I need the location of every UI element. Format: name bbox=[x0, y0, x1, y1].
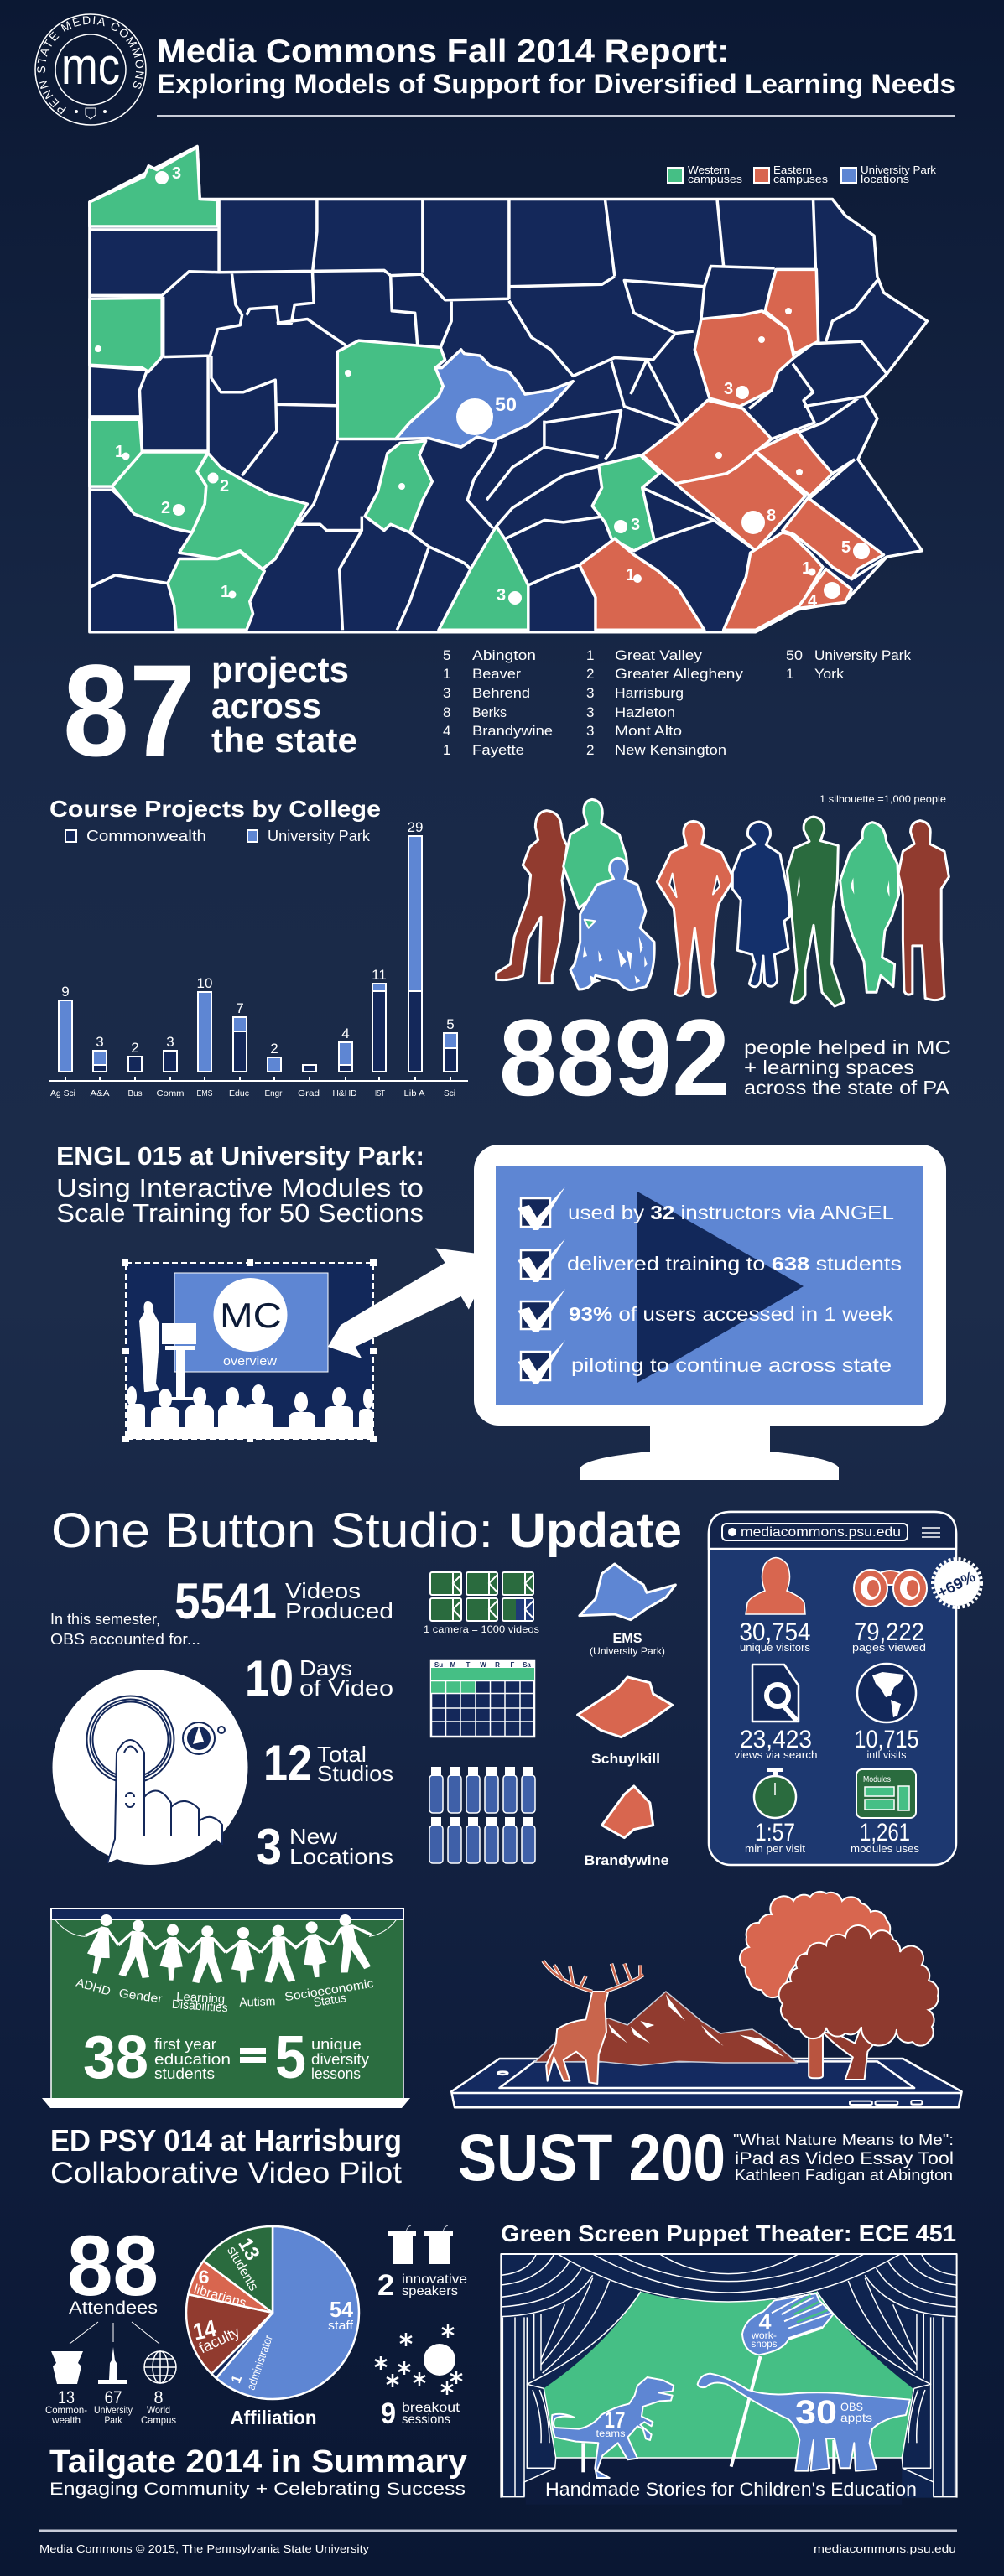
heading: ENGL 015: ENGL 015 at University Park: bbox=[56, 1141, 424, 1171]
icon: world globe bbox=[144, 2351, 176, 2383]
campus project list: 1 bbox=[443, 666, 450, 682]
OBS stats text: In this semester, bbox=[50, 1611, 160, 1628]
icon: modules: Modules bbox=[863, 1775, 891, 1784]
bar chart: course projects by college: Lib A bbox=[404, 1088, 424, 1098]
pie chart: affiliation: students bbox=[224, 2244, 261, 2293]
presenter slide illustration: overview bbox=[223, 1354, 277, 1368]
icon: breakout sessions burst: sessions bbox=[402, 2412, 450, 2427]
stat: visitors and pages: unique visitors bbox=[740, 1642, 810, 1654]
bar chart: course projects by college: Grad bbox=[298, 1088, 320, 1098]
heading: One Button Studio Update: One Button Studio: bbox=[51, 1504, 493, 1558]
logo: Penn State Media Commons seal: mc bbox=[61, 38, 120, 96]
equation: 38 students = 5 lessons: unique bbox=[311, 2036, 362, 2053]
campus project list: 1 bbox=[786, 666, 793, 682]
equation: 38 students = 5 lessons: first year bbox=[154, 2036, 216, 2053]
icon: breakout sessions burst: 9 bbox=[381, 2397, 396, 2430]
attendee breakdown icons: wealth bbox=[51, 2414, 81, 2426]
monitor with checklist: 93% of users accessed in 1 week bbox=[569, 1303, 894, 1325]
monitor with checklist: delivered training to 638 students bbox=[567, 1253, 902, 1275]
big stat: 87 projects: projects bbox=[211, 650, 349, 689]
OBS stats text: Locations bbox=[289, 1844, 393, 1869]
OBS stats text: OBS accounted for... bbox=[50, 1631, 200, 1648]
campus project list: 8 bbox=[443, 704, 450, 720]
pie chart: affiliation bbox=[186, 2226, 359, 2428]
title: Exploring Models of Support for Diversified Learning Needs bbox=[157, 69, 955, 99]
OBS stats text: Studios bbox=[317, 1761, 393, 1786]
diversity topic labels: Autism bbox=[239, 1995, 276, 2010]
campus project list bbox=[443, 647, 911, 758]
attendee breakdown icons: University bbox=[94, 2404, 133, 2416]
map campus dots and counts: 8 bbox=[767, 506, 776, 525]
pie chart: affiliation: 6 bbox=[198, 2267, 210, 2288]
heading: Tailgate 2014: Engaging Community + Celebrating Success bbox=[49, 2480, 466, 2499]
pictogram: cameras: 1 camera = 1000 videos bbox=[424, 1623, 539, 1635]
puppet: T. rex bbox=[552, 2377, 674, 2478]
stat: 88 attendees: 88 bbox=[67, 2218, 159, 2314]
bar chart: course projects by college: Engr bbox=[265, 1088, 283, 1098]
map campus dots and counts: 5 bbox=[841, 538, 851, 557]
stat: search and intl: 23,423 bbox=[740, 1726, 812, 1753]
bar chart: course projects by college: Sci bbox=[444, 1088, 455, 1098]
big stat: 8892 people helped: across the state of PA bbox=[744, 1077, 950, 1098]
map legend: Eastern bbox=[773, 164, 812, 176]
county shapes: new OBS locations bbox=[578, 1564, 675, 1868]
big stat: 8892 people helped bbox=[499, 996, 951, 1119]
stat: time and modules: 1,261 bbox=[860, 1819, 910, 1846]
campus project list: 3 bbox=[586, 704, 594, 720]
big stat: 87 projects: across bbox=[211, 686, 321, 725]
heading: SUST 200: "What Nature Means to Me": bbox=[733, 2132, 954, 2148]
silhouette note: 1 silhouette =1,000 people bbox=[819, 793, 946, 805]
presenter slide illustration bbox=[122, 1259, 377, 1442]
big stat: 87 projects: the state bbox=[211, 720, 357, 760]
icon: globe bbox=[857, 1664, 916, 1722]
map campus dots and counts: 3 bbox=[172, 164, 181, 183]
heading: ED PSY 014 bbox=[50, 2123, 402, 2189]
equation: 38 students = 5 lessons: 38 bbox=[83, 2024, 148, 2091]
icon: visitor bbox=[746, 1558, 805, 1614]
logo: Penn State Media Commons seal: PENN STATE MEDIA COMMONS bbox=[37, 16, 144, 114]
heading: Tailgate 2014: Tailgate 2014 in Summary bbox=[49, 2444, 467, 2480]
presenter slide illustration: MC bbox=[220, 1296, 282, 1335]
big stat: 8892 people helped: people helped in MC bbox=[744, 1036, 951, 1058]
OBS stats text: Produced bbox=[285, 1598, 393, 1623]
bar chart: course projects by college: 7 bbox=[236, 1000, 244, 1016]
theater with puppets: 4 bbox=[758, 2309, 772, 2334]
map campus dots and counts: 3 bbox=[724, 380, 733, 398]
pictogram: calendar bbox=[431, 1661, 534, 1737]
stat: search and intl: intl visits bbox=[867, 1749, 906, 1761]
people silhouettes bbox=[497, 799, 949, 1006]
stat: time and modules: 1:57 bbox=[755, 1819, 795, 1846]
pie chart: affiliation: 54 bbox=[330, 2297, 354, 2322]
campus project list: Fayette bbox=[472, 742, 524, 758]
footer: Media Commons © 2015, The Pennsylvania State University bbox=[39, 2542, 370, 2555]
campus project list: New Kensington bbox=[615, 742, 726, 758]
map campus dots and counts: 4 bbox=[808, 592, 818, 610]
tree: dark crown bbox=[779, 1925, 939, 2046]
attendee breakdown icons: 8 bbox=[154, 2388, 163, 2407]
bar chart: course projects by college: Ag Sci bbox=[50, 1088, 75, 1098]
big stat: 8892 people helped: + learning spaces bbox=[744, 1057, 914, 1078]
campus project list: 3 bbox=[586, 685, 594, 701]
pictogram: calendar: W bbox=[480, 1661, 486, 1669]
map legend: locations bbox=[861, 173, 910, 185]
bar chart: course projects by college: 3 bbox=[166, 1034, 174, 1050]
arrow: two-way slide to screen bbox=[328, 1248, 494, 1358]
footer bbox=[39, 2529, 957, 2555]
theater with puppets: shops bbox=[752, 2338, 777, 2350]
pie chart: affiliation: librarians bbox=[192, 2283, 247, 2311]
stat: search and intl: views via search bbox=[735, 1749, 818, 1761]
pictogram: USB drives bbox=[429, 1767, 535, 1863]
theater with puppets: 30 bbox=[795, 2394, 837, 2431]
big stat: 8892 people helped: 8892 bbox=[499, 996, 730, 1119]
heading: ENGL 015 bbox=[56, 1141, 424, 1228]
campus project list: 1 bbox=[586, 647, 594, 663]
diversity topic labels: Gender bbox=[118, 1987, 164, 2007]
bar chart: course projects by college: 10 bbox=[197, 975, 212, 991]
bar chart: course projects by college: Bus bbox=[127, 1088, 143, 1098]
map campus dots and counts bbox=[95, 164, 870, 610]
pictogram: calendar: Sa bbox=[523, 1661, 531, 1669]
pictogram: calendar: F bbox=[511, 1661, 515, 1669]
attendee breakdown icons: 67 bbox=[104, 2388, 122, 2407]
pie chart: affiliation: administrator bbox=[244, 2333, 275, 2392]
pie chart: affiliation: 1 bbox=[229, 2373, 245, 2386]
badge: +69% bbox=[933, 1559, 981, 1607]
heading: ED PSY 014: ED PSY 014 at Harrisburg bbox=[50, 2123, 402, 2158]
map campus dots and counts: 3 bbox=[631, 516, 640, 534]
equation: 38 students = 5 lessons: lessons bbox=[311, 2065, 361, 2082]
icon: one button with finger bbox=[52, 1670, 248, 1865]
heading: Course Projects by College bbox=[49, 796, 381, 844]
bar chart: course projects by college: 4 bbox=[341, 1026, 350, 1041]
footer: mediacommons.psu.edu bbox=[814, 2542, 956, 2555]
equation: 38 students = 5 lessons bbox=[83, 2024, 369, 2091]
heading: One Button Studio Update bbox=[51, 1504, 682, 1558]
map legend bbox=[668, 164, 936, 185]
bar chart: course projects by college: 9 bbox=[61, 984, 70, 1000]
map legend: University Park bbox=[861, 164, 936, 176]
campus project list: Beaver bbox=[472, 666, 521, 682]
map campus dots and counts: 1 bbox=[802, 559, 811, 578]
bar chart: course projects by college: 3 bbox=[96, 1034, 104, 1050]
bar chart: course projects by college: Educ bbox=[229, 1088, 249, 1098]
deer bbox=[543, 1961, 643, 2084]
attendee breakdown icons: World bbox=[147, 2404, 170, 2416]
title bbox=[157, 34, 955, 117]
theater with puppets: 17 bbox=[604, 2407, 626, 2433]
stat: visitors and pages: 79,222 bbox=[854, 1618, 924, 1646]
title: Media Commons Fall 2014 Report: bbox=[157, 34, 729, 70]
monitor with checklist bbox=[474, 1145, 946, 1480]
theater with puppets bbox=[501, 2254, 957, 2505]
icon: speaker podiums: 2 bbox=[377, 2269, 394, 2302]
icon: modules bbox=[856, 1769, 916, 1818]
pictogram: calendar: R bbox=[495, 1661, 500, 1669]
stat: time and modules: modules uses bbox=[851, 1843, 919, 1855]
diversity topic labels: Status bbox=[313, 1992, 347, 2010]
theater with puppets: teams bbox=[596, 2428, 626, 2439]
stat: search and intl bbox=[735, 1726, 919, 1761]
heading: ED PSY 014: Collaborative Video Pilot bbox=[50, 2157, 402, 2189]
stat: time and modules: min per visit bbox=[745, 1843, 806, 1855]
heading: Tailgate 2014 bbox=[49, 2444, 467, 2499]
map campus dots and counts: 1 bbox=[626, 566, 635, 584]
campus project list: 5 bbox=[443, 647, 450, 663]
attendee breakdown icons: Campus bbox=[141, 2414, 176, 2426]
heading: Green Screen Puppet Theater: Green Screen Puppet Theater: ECE 451 bbox=[501, 2220, 956, 2246]
theater with puppets: appts bbox=[840, 2411, 872, 2424]
heading: ENGL 015: Using Interactive Modules to bbox=[56, 1173, 424, 1202]
campus project list: Greater Allegheny bbox=[615, 666, 744, 682]
pie chart: affiliation: faculty bbox=[196, 2324, 242, 2356]
stage backdrop bbox=[501, 2254, 957, 2498]
map campus dots and counts: 2 bbox=[161, 499, 170, 517]
icon: speaker podiums: speakers bbox=[402, 2284, 458, 2298]
OBS stats text: 12 bbox=[263, 1735, 312, 1791]
equation: 38 students = 5 lessons: diversity bbox=[311, 2051, 369, 2068]
bar chart: course projects by college: 5 bbox=[446, 1016, 455, 1032]
pie chart: affiliation: staff bbox=[328, 2319, 354, 2333]
icon: binoculars bbox=[854, 1570, 927, 1607]
campus project list: Abington bbox=[472, 647, 536, 663]
diversity topic labels: Disabilities bbox=[171, 1998, 228, 2015]
bar chart: course projects by college bbox=[49, 819, 468, 1098]
equation: 38 students = 5 lessons: 5 bbox=[275, 2024, 306, 2091]
campus project list: Great Valley bbox=[615, 647, 703, 663]
panel: mediacommons website stats: mediacommons.psu.edu bbox=[741, 1525, 901, 1540]
theater with puppets: OBS bbox=[840, 2400, 863, 2413]
OBS stats text: 10 bbox=[245, 1650, 294, 1706]
stat: visitors and pages bbox=[740, 1618, 926, 1654]
stat: visitors and pages: 30,754 bbox=[740, 1618, 810, 1646]
pictogram: cameras bbox=[424, 1572, 539, 1635]
icon: stopwatch bbox=[754, 1768, 796, 1818]
icon: keystone bbox=[51, 2351, 83, 2384]
OBS stats text: Total bbox=[317, 1742, 367, 1767]
diversity topic labels bbox=[75, 1976, 374, 2015]
attendee breakdown icons: Common- bbox=[45, 2404, 87, 2416]
county shapes: new OBS locations: EMS bbox=[612, 1630, 642, 1646]
heading: SUST 200 bbox=[458, 2120, 954, 2194]
county shapes: new OBS locations: Brandywine bbox=[584, 1852, 669, 1868]
bar chart: course projects by college: IST bbox=[375, 1088, 385, 1098]
campus project list: 1 bbox=[443, 742, 450, 758]
map legend: campuses bbox=[773, 173, 829, 185]
campus project list: Berks bbox=[472, 704, 507, 720]
heading: ENGL 015: Scale Training for 50 Sections bbox=[56, 1198, 424, 1228]
OBS stats text: Days bbox=[299, 1655, 352, 1680]
campus project list: 4 bbox=[443, 723, 450, 739]
campus project list: Behrend bbox=[472, 685, 530, 701]
OBS stats text: New bbox=[289, 1824, 337, 1849]
theater with puppets: Handmade Stories for Children's Education bbox=[545, 2479, 917, 2500]
pie chart: affiliation: Affiliation bbox=[230, 2407, 317, 2428]
heading: Course Projects by College: University Park bbox=[268, 828, 371, 844]
theater with puppets: work- bbox=[751, 2329, 777, 2341]
campus project list: University Park bbox=[814, 647, 911, 663]
pie chart: affiliation: 14 bbox=[191, 2315, 219, 2345]
campus project list: Harrisburg bbox=[615, 685, 684, 701]
campus project list: 3 bbox=[443, 685, 450, 701]
heading: One Button Studio Update: Update bbox=[509, 1504, 682, 1558]
bar chart: course projects by college: 2 bbox=[270, 1041, 278, 1057]
campus project list: Hazleton bbox=[615, 704, 675, 720]
map campus dots and counts: 1 bbox=[221, 583, 230, 601]
bar chart: course projects by college: 11 bbox=[372, 967, 387, 983]
puppet: brontosaurus and hand bbox=[698, 2293, 910, 2474]
heading: Course Projects by College: Course Projects by College bbox=[49, 796, 381, 822]
map campus dots and counts: 3 bbox=[497, 586, 506, 605]
pictogram: calendar: T bbox=[466, 1661, 471, 1669]
icon: search bbox=[752, 1665, 799, 1722]
diversity topic labels: ADHD bbox=[75, 1976, 112, 1999]
bar chart: course projects by college: A&A bbox=[91, 1088, 109, 1098]
icon: speaker podiums bbox=[377, 2225, 467, 2302]
OBS stats text: Videos bbox=[285, 1578, 361, 1603]
stat: search and intl: 10,715 bbox=[854, 1726, 919, 1753]
icon: speaker podiums: innovative bbox=[402, 2272, 467, 2287]
big stat: 87 projects: 87 bbox=[63, 638, 195, 784]
monitor with checklist: piloting to continue across state bbox=[571, 1354, 892, 1376]
badge: +69%: +69% bbox=[934, 1568, 978, 1601]
county shapes: new OBS locations: Schuylkill bbox=[591, 1751, 660, 1767]
panel: mediacommons website stats bbox=[709, 1512, 981, 1865]
heading: SUST 200: SUST 200 bbox=[458, 2120, 726, 2194]
illustration: iPad with deer, mountains and trees bbox=[451, 1892, 962, 2107]
campus project list: 50 bbox=[786, 647, 803, 663]
heading: SUST 200: Kathleen Fadigan at Abington bbox=[735, 2167, 953, 2184]
bar chart: course projects by college: EMS bbox=[196, 1088, 213, 1098]
diversity topic labels: Socioeconomic bbox=[284, 1977, 374, 2004]
pie chart: affiliation: 13 bbox=[233, 2234, 264, 2264]
map legend: campuses bbox=[688, 173, 743, 185]
map campus dots and counts: 1 bbox=[115, 443, 124, 461]
pictogram: calendar: M bbox=[450, 1661, 456, 1669]
bar chart: course projects by college: 29 bbox=[408, 819, 423, 835]
map legend: Western bbox=[688, 164, 730, 176]
OBS stats text bbox=[50, 1573, 393, 1875]
panel: chalkboard bbox=[42, 1909, 410, 2108]
big stat: 87 projects bbox=[63, 638, 357, 784]
paper people chain bbox=[55, 1910, 397, 1983]
icon: breakout sessions burst: breakout bbox=[402, 2401, 460, 2415]
attendee breakdown icons bbox=[45, 2347, 176, 2426]
attendee breakdown icons: Park bbox=[104, 2414, 122, 2426]
campus project list: 2 bbox=[586, 666, 594, 682]
county shapes: new OBS locations: (University Park) bbox=[590, 1645, 665, 1657]
stat: time and modules bbox=[745, 1819, 919, 1855]
bar chart: course projects by college: Comm bbox=[156, 1088, 185, 1098]
equation: 38 students = 5 lessons: education bbox=[154, 2051, 231, 2068]
heading: Course Projects by College: Commonwealth bbox=[86, 828, 206, 844]
heading: SUST 200: iPad as Video Essay Tool bbox=[735, 2149, 954, 2168]
map: Pennsylvania counties bbox=[90, 146, 927, 632]
campus project list: Mont Alto bbox=[615, 723, 682, 739]
icon: Old Main tower bbox=[98, 2347, 127, 2384]
bar chart: course projects by college: H&HD bbox=[332, 1088, 357, 1098]
campus project list: 2 bbox=[586, 742, 594, 758]
map campus dots and counts: 2 bbox=[220, 477, 229, 496]
tree: light crown bbox=[740, 1892, 890, 1997]
OBS stats text: 5541 bbox=[174, 1573, 277, 1629]
OBS stats text: 3 bbox=[256, 1819, 282, 1875]
campus project list: Brandywine bbox=[472, 723, 553, 739]
bar chart: course projects by college: 2 bbox=[131, 1040, 139, 1056]
stat: visitors and pages: pages viewed bbox=[852, 1642, 926, 1654]
campus project list: 3 bbox=[586, 723, 594, 739]
OBS stats text: of Video bbox=[299, 1675, 393, 1701]
icon: breakout sessions burst bbox=[375, 2324, 462, 2430]
monitor with checklist: used by 32 instructors via ANGEL bbox=[568, 1202, 894, 1223]
campus project list: York bbox=[814, 666, 845, 682]
map campus dots and counts: 50 bbox=[495, 394, 517, 415]
equation: 38 students = 5 lessons: students bbox=[154, 2065, 215, 2082]
stat: 88 attendees: Attendees bbox=[69, 2298, 158, 2318]
pictogram: calendar: Su bbox=[434, 1661, 443, 1669]
attendee breakdown icons: 13 bbox=[58, 2388, 75, 2407]
diversity topic labels: Learning bbox=[176, 1990, 226, 2007]
